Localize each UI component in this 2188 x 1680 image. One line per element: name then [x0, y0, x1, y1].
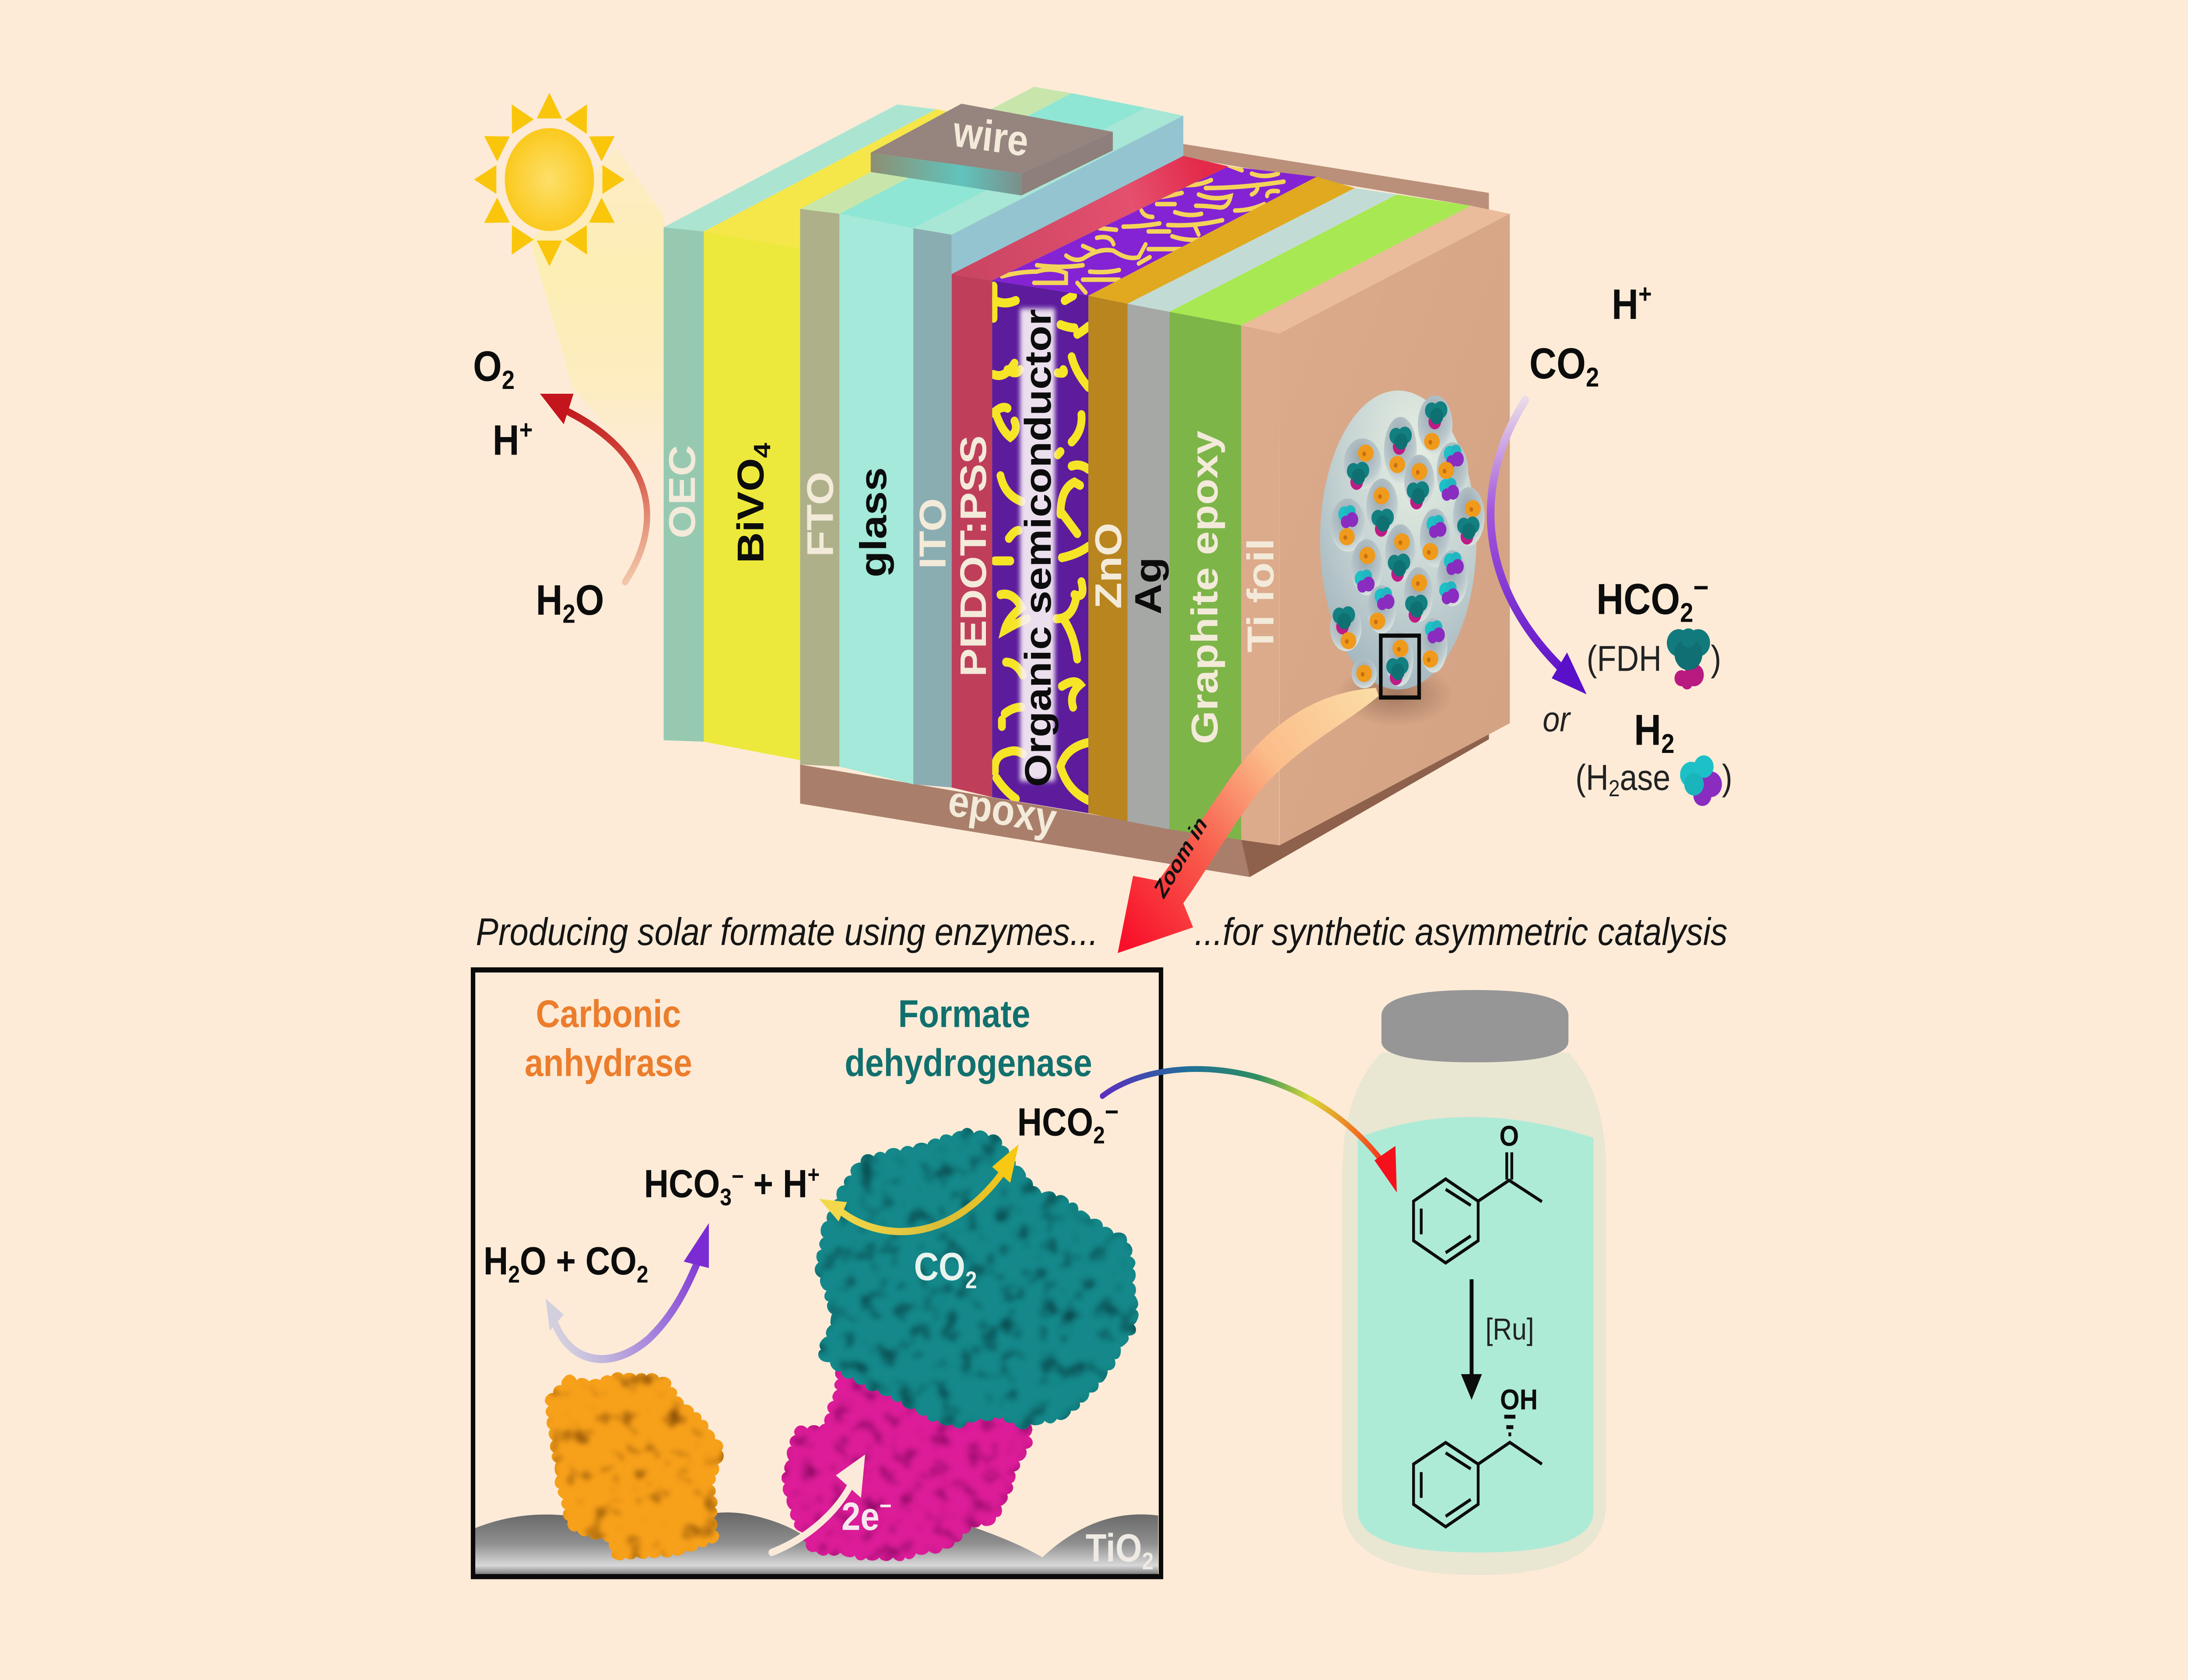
label: H2O left: 2 — [563, 599, 575, 629]
label: CO2 right: CO — [1529, 339, 1586, 388]
label: formate: HCO — [1017, 1100, 1093, 1144]
OEC layer: OEC — [661, 445, 703, 539]
epoxy base — [800, 728, 1489, 877]
pores with enzymes — [1330, 396, 1485, 688]
label: formate: − — [1105, 1097, 1119, 1127]
ZnO layer — [1087, 296, 1129, 821]
sun light beam — [530, 148, 664, 498]
label: carbonic anhydrase: anhydrase — [525, 1041, 692, 1085]
OEC layer — [661, 227, 704, 742]
label: bicarbonate and proton: HCO — [644, 1162, 720, 1206]
arrow: FDH reaction — [819, 1144, 1019, 1232]
label: OH: OH — [1500, 1384, 1538, 1416]
graphite epoxy layer — [1169, 312, 1241, 840]
Ag layer — [1127, 304, 1169, 830]
label: H2O left: O — [575, 577, 604, 624]
liquid — [1358, 1117, 1594, 1553]
label: H2ase: ase — [1620, 758, 1670, 798]
Ag layer: Ag — [1127, 557, 1169, 615]
organic semiconductor layer — [992, 280, 1088, 813]
back epoxy strip — [1183, 144, 1489, 210]
ZnO layer: ZnO — [1087, 523, 1129, 609]
protein: carbonic anhydrase — [552, 1379, 719, 1554]
TiO2 surface — [474, 1512, 1158, 1575]
label: FDH — [1587, 628, 1721, 690]
label: or: or — [1543, 700, 1571, 739]
label: O2: 2 — [502, 366, 515, 395]
label: FDH: (FDH — [1587, 639, 1662, 679]
label: formate product: HCO — [1596, 575, 1680, 623]
heading: solar formate: Producing solar formate using enzymes... — [476, 910, 1098, 953]
label: H+ right: H — [1612, 281, 1638, 329]
label: bicarbonate and proton: − — [732, 1162, 744, 1190]
arrow: carbonic anhydrase reaction — [546, 1223, 709, 1359]
label: O2: O — [473, 343, 502, 390]
cap — [1382, 990, 1568, 1062]
label: H+ right: + — [1638, 280, 1652, 309]
glass layer: glass — [852, 467, 894, 578]
epoxy label: epoxy — [946, 776, 1060, 844]
FTO layer — [799, 209, 841, 766]
label: formate dehydrogenase: Formate — [898, 992, 1030, 1036]
label: H2ase: ) — [1722, 758, 1732, 798]
panel: layered device stack — [661, 87, 1510, 877]
jar body — [1343, 1053, 1606, 1575]
molecule: phenylethanol — [1413, 1417, 1542, 1527]
shadow under pore — [1337, 662, 1454, 726]
label: H+ left: H — [493, 416, 519, 464]
molecule: acetophenone — [1413, 1152, 1542, 1263]
label: formate dehydrogenase: dehydrogenase — [845, 1041, 1092, 1085]
top faces of anode layers — [664, 87, 1183, 276]
label: H2ase: (H — [1575, 758, 1609, 798]
arrow: formate to jar — [1102, 1069, 1397, 1193]
label: formate: 2 — [1093, 1121, 1105, 1148]
label: water and CO2: O + CO — [520, 1239, 637, 1283]
label: TiO2: 2 — [1142, 1547, 1154, 1575]
glass layer — [839, 214, 913, 784]
side face of device — [1279, 214, 1510, 845]
BiVO4 layer: 4 — [749, 443, 775, 458]
label: water and CO2: 2 — [508, 1260, 520, 1288]
arrow: CO2 reduction — [1490, 400, 1587, 694]
icon: sun — [474, 93, 625, 266]
ITO layer — [912, 228, 954, 788]
label: bicarbonate and proton: 3 — [720, 1183, 732, 1211]
label: 2e-: − — [880, 1492, 892, 1519]
label: water and CO2: H — [484, 1239, 508, 1283]
panel: enzyme cascade — [473, 970, 1161, 1577]
icon: FDH enzyme — [1667, 628, 1710, 690]
wire contact — [871, 104, 1113, 196]
label: H2ase: 2 — [1609, 775, 1620, 802]
protein: FDH lower subunit — [788, 1364, 1024, 1554]
label: formate product: − — [1693, 570, 1709, 604]
label: CO2 right: 2 — [1586, 362, 1599, 392]
label: TiO2: TiO — [1086, 1526, 1142, 1570]
label: FDH: ) — [1711, 639, 1721, 679]
label: CO2 on enzyme: CO — [914, 1245, 965, 1288]
arrow: electrons — [771, 1455, 865, 1553]
label: H2ase — [1575, 756, 1732, 806]
label: H+ left: + — [519, 415, 533, 445]
arrow: zoom in: Zoom in — [1149, 812, 1212, 903]
label: [Ru]: [Ru] — [1485, 1312, 1534, 1346]
FTO layer: FTO — [799, 472, 841, 557]
arrow: reaction — [1461, 1279, 1482, 1400]
label: formate product: 2 — [1680, 598, 1693, 628]
BiVO4 layer: BiVO — [729, 458, 771, 564]
frame — [473, 970, 1161, 1577]
label: H2 product: 2 — [1661, 728, 1674, 759]
graphite epoxy layer: Graphite epoxy — [1184, 430, 1226, 744]
label: 2e-: 2e — [842, 1494, 880, 1538]
wire contact: wire — [950, 107, 1031, 166]
ITO layer: ITO — [912, 498, 954, 569]
heading: asymmetric catalysis: ...for synthetic asymmetric catalysis — [1195, 910, 1728, 953]
label: O: O — [1499, 1120, 1519, 1152]
top faces of cathode layers — [952, 156, 1510, 333]
label: H2 product: H — [1634, 706, 1661, 754]
label: bicarbonate and proton: + — [807, 1161, 820, 1188]
PEDOT:PSS layer — [952, 274, 994, 797]
panel: reaction jar — [1343, 990, 1606, 1575]
BiVO4 layer — [704, 231, 800, 760]
zoom selection box — [1381, 636, 1419, 697]
Ti foil layer: Ti foil — [1240, 539, 1281, 652]
icon: hydrogenase enzyme — [1680, 756, 1722, 806]
Ti foil layer — [1240, 326, 1281, 845]
PEDOT:PSS layer: PEDOT:PSS — [953, 435, 994, 677]
white text halo — [1020, 308, 1055, 781]
label: carbonic anhydrase: Carbonic — [536, 992, 681, 1036]
arrow: zoom in — [1118, 688, 1379, 953]
protein: formate dehydrogenase — [822, 1136, 1130, 1421]
porous electrode — [1320, 391, 1485, 690]
label: CO2 on enzyme: 2 — [965, 1266, 977, 1293]
label: water and CO2: 2 — [637, 1260, 648, 1288]
label: H2O left: H — [536, 577, 563, 624]
label: bicarbonate and proton: + H — [744, 1162, 807, 1206]
arrow: water oxidation — [540, 394, 647, 582]
organic semiconductor layer: Organic semiconductor — [1017, 309, 1059, 787]
